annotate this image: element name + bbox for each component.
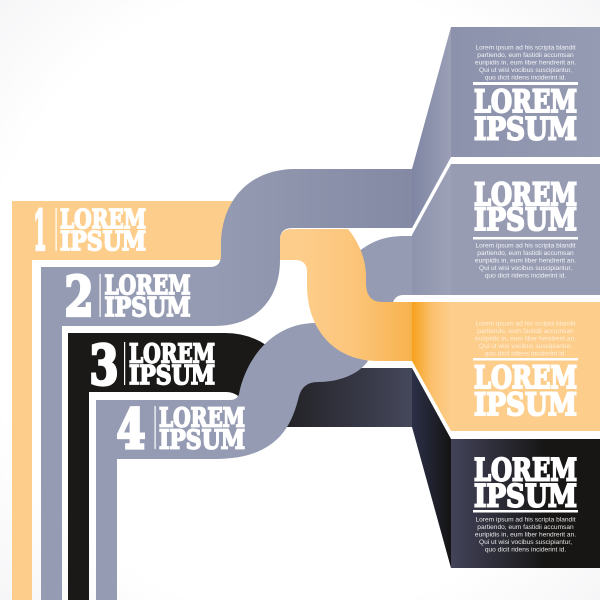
panel 3 rule [473, 358, 578, 360]
panel 3 heading: IPSUM [474, 387, 577, 423]
label 2 divider [100, 274, 101, 317]
ribbon 2: grey [41, 169, 412, 600]
connector: orange strand [280, 229, 412, 361]
connector: grey strand to panel 2 [358, 236, 412, 302]
label 2 heading: IPSUM [104, 293, 190, 323]
number 4: 4 [116, 397, 146, 461]
label 4 heading: IPSUM [159, 426, 245, 456]
connector: dark strand [285, 368, 412, 427]
panel 1 fold [412, 27, 451, 228]
panel 1 body text: euripidis in, eum liber hendrerit an. [475, 60, 576, 66]
panel 4 heading: IPSUM [474, 478, 577, 514]
label 1 heading: LOREM [60, 205, 146, 235]
panel 3 body text: euripidis in, eum liber hendrerit an. [475, 336, 576, 342]
label 2 [64, 264, 190, 328]
panel 4 rule [473, 510, 578, 512]
panel 2 face [451, 164, 600, 295]
panel 3: orange [412, 302, 600, 431]
label 4 heading [159, 404, 245, 456]
number 3: 3 [90, 333, 118, 397]
panel 1 body text: partiendo, eum fastidii accumsan [477, 52, 574, 59]
panel 1 rule [473, 82, 578, 85]
ribbon 4: grey [96, 323, 368, 600]
panel 4 face [451, 439, 600, 568]
label 1 divider [56, 208, 57, 251]
panel 1: grey [412, 27, 600, 228]
label 3 heading [129, 340, 215, 391]
panel 2 body text: Lorem ipsum ad his scripta blandit [475, 242, 576, 250]
label 4 divider [154, 406, 156, 449]
panel 4 body text: Lorem ipsum ad his scripta blandit [475, 516, 576, 524]
panel 4 heading [474, 452, 577, 514]
panel 4 body text: quo dicit ridens inciderint id. [485, 546, 566, 554]
label 4 heading: LOREM [159, 404, 245, 434]
panel 4 body text: euripidis in, eum liber hendrerit an. [475, 532, 576, 538]
panel 2 body text: partiendo, eum fastidii accumsan [477, 250, 574, 257]
label 2 heading: LOREM [104, 271, 190, 301]
label 3 divider [124, 342, 125, 385]
panel 3 body text: Qui ut wisi vocibus suscipiantur, [479, 343, 572, 350]
panel 3 face [451, 302, 600, 431]
panel 2 heading [474, 177, 577, 238]
panel 3 body text [475, 320, 576, 358]
panel 2 body text [475, 242, 576, 280]
label 1 heading [60, 205, 146, 257]
label 3 heading: LOREM [129, 340, 215, 370]
label 2 heading [104, 271, 190, 323]
panel 1 body text: Qui ut wisi vocibus suscipiantur, [479, 67, 572, 74]
panel 3 body text: Lorem ipsum ad his scripta blandit [475, 320, 576, 328]
panel 1 heading: IPSUM [474, 112, 577, 148]
number 2: 2 [64, 264, 94, 328]
panel 3 body text: quo dicit ridens inciderint id. [485, 350, 566, 358]
panel 4 body text: Qui ut wisi vocibus suscipiantur, [479, 539, 572, 546]
panel 2: grey [412, 164, 600, 295]
panel 2 body text: quo dicit ridens inciderint id. [485, 272, 566, 280]
panel 1 body text: Lorem ipsum ad his scripta blandit [475, 44, 576, 52]
panel 2 fold [412, 164, 451, 295]
label 4 [116, 397, 245, 461]
panel 4: black [412, 368, 600, 568]
ribbon 3: black [68, 333, 266, 600]
label 1 heading: IPSUM [60, 227, 146, 257]
panel 3 body text: partiendo, eum fastidii accumsan [477, 328, 574, 335]
panel 2 body text: euripidis in, eum liber hendrerit an. [475, 258, 576, 264]
label 1: 1 [34, 198, 46, 262]
panel 3 heading [474, 360, 577, 423]
panel 4 fold [412, 368, 451, 568]
panel 4 body text [475, 516, 576, 554]
panel 4 body text: partiendo, eum fastidii accumsan [477, 524, 574, 531]
ribbon 1: orange [12, 201, 240, 600]
panel 1 face [451, 27, 600, 157]
panel 2 body text: Qui ut wisi vocibus suscipiantur, [479, 265, 572, 272]
panel 1 body text: quo dicit ridens inciderint id. [485, 74, 566, 82]
panel 1 heading [474, 84, 577, 148]
label 1 [34, 198, 146, 262]
label 3 [90, 333, 215, 397]
panel 1 body text [475, 44, 576, 82]
panel 3 fold [412, 302, 451, 431]
panel 2 rule [473, 237, 578, 240]
label 3 heading: IPSUM [129, 361, 215, 391]
panel 2 heading: IPSUM [474, 202, 577, 238]
